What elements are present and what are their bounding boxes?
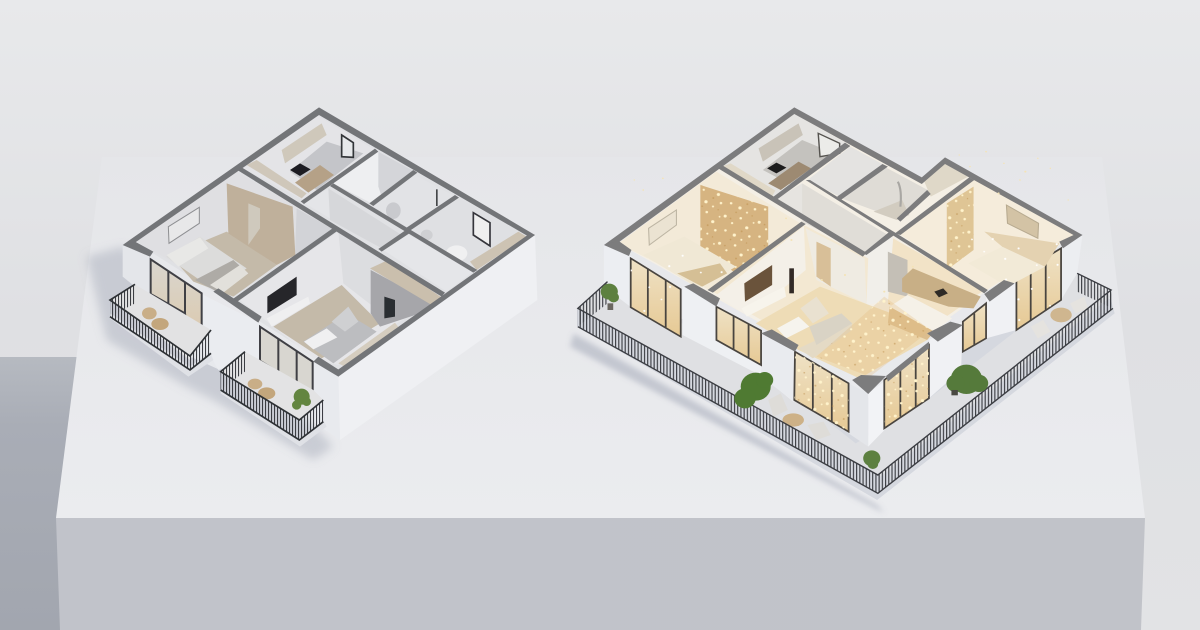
kitchen units <box>371 270 433 327</box>
plinth: front face <box>56 518 1145 630</box>
interior base <box>618 113 1075 378</box>
balcony one <box>110 284 213 377</box>
coffee table <box>777 317 809 338</box>
artwork <box>649 210 676 245</box>
tv <box>267 277 297 313</box>
wardrobe <box>227 183 295 265</box>
bedroom floor <box>170 232 277 297</box>
lower closet <box>383 233 473 292</box>
small closet room <box>924 163 968 197</box>
terrace slab <box>577 273 1115 500</box>
tv <box>744 265 772 302</box>
bedroom <box>137 172 333 297</box>
front wall right segment <box>313 362 340 440</box>
right exterior wall <box>338 235 537 440</box>
bed <box>643 237 736 288</box>
bathroom <box>841 167 931 220</box>
bathroom one <box>372 175 455 228</box>
upper cabinets <box>282 123 327 163</box>
exterior walls <box>604 235 1082 447</box>
wardrobe glow <box>700 185 768 275</box>
counter <box>902 268 981 308</box>
floor lamp <box>789 268 794 293</box>
living floor <box>756 287 927 378</box>
front wall lower strip <box>152 297 220 370</box>
plant: front left shrub <box>734 372 773 408</box>
plant <box>292 389 311 410</box>
kitchen <box>720 114 847 197</box>
left apartment: plain unlit model <box>87 107 537 460</box>
rug <box>303 313 377 363</box>
terrace floor <box>578 273 1111 477</box>
living room <box>713 225 927 378</box>
tv console <box>741 287 786 317</box>
floating sparkles <box>634 151 1069 293</box>
front wall middle segment <box>200 293 260 370</box>
kitchen <box>243 115 375 200</box>
hallway <box>305 188 402 248</box>
glowing windows <box>631 248 1061 432</box>
hallway <box>777 183 893 305</box>
bedroom window <box>151 259 202 340</box>
rug <box>809 313 852 345</box>
plant: corner <box>863 450 880 469</box>
plant: front right shrub <box>946 365 988 395</box>
terrace railing <box>578 273 1113 493</box>
fridge <box>888 252 907 297</box>
artwork <box>168 207 199 243</box>
left bedroom <box>618 172 800 290</box>
ground shadow <box>87 247 333 460</box>
sofa <box>338 323 399 367</box>
dark wall tops <box>604 107 1082 394</box>
island <box>890 295 952 332</box>
right apartment: glowing furnished model <box>570 107 1115 513</box>
plinth: top surface <box>56 157 1145 518</box>
coffee table <box>304 328 337 349</box>
tv console <box>267 297 310 327</box>
balcony two <box>221 352 327 447</box>
closet room <box>807 147 884 197</box>
sparkle overlay <box>631 248 1061 432</box>
dark wall tops <box>123 107 535 377</box>
right bedroom <box>899 178 1075 290</box>
bed <box>166 237 247 291</box>
terrace furniture <box>768 297 1088 440</box>
interior base <box>135 114 530 372</box>
ground shadow <box>570 333 884 513</box>
living floor <box>273 285 380 358</box>
plant: terrace left <box>601 284 619 310</box>
closet room <box>333 152 415 203</box>
window <box>342 135 353 157</box>
island <box>295 165 334 193</box>
sofa <box>799 323 852 358</box>
living room <box>240 232 443 367</box>
armchair <box>800 297 829 323</box>
open kitchen <box>888 238 984 340</box>
bed <box>968 245 1045 287</box>
front wall left segment <box>123 245 152 300</box>
living room window <box>260 327 313 400</box>
door <box>816 242 831 287</box>
artwork <box>1006 205 1039 238</box>
armchair <box>332 307 358 332</box>
wardrobe glow <box>947 187 974 270</box>
bathroom two <box>413 198 530 270</box>
cooktop <box>290 163 311 176</box>
